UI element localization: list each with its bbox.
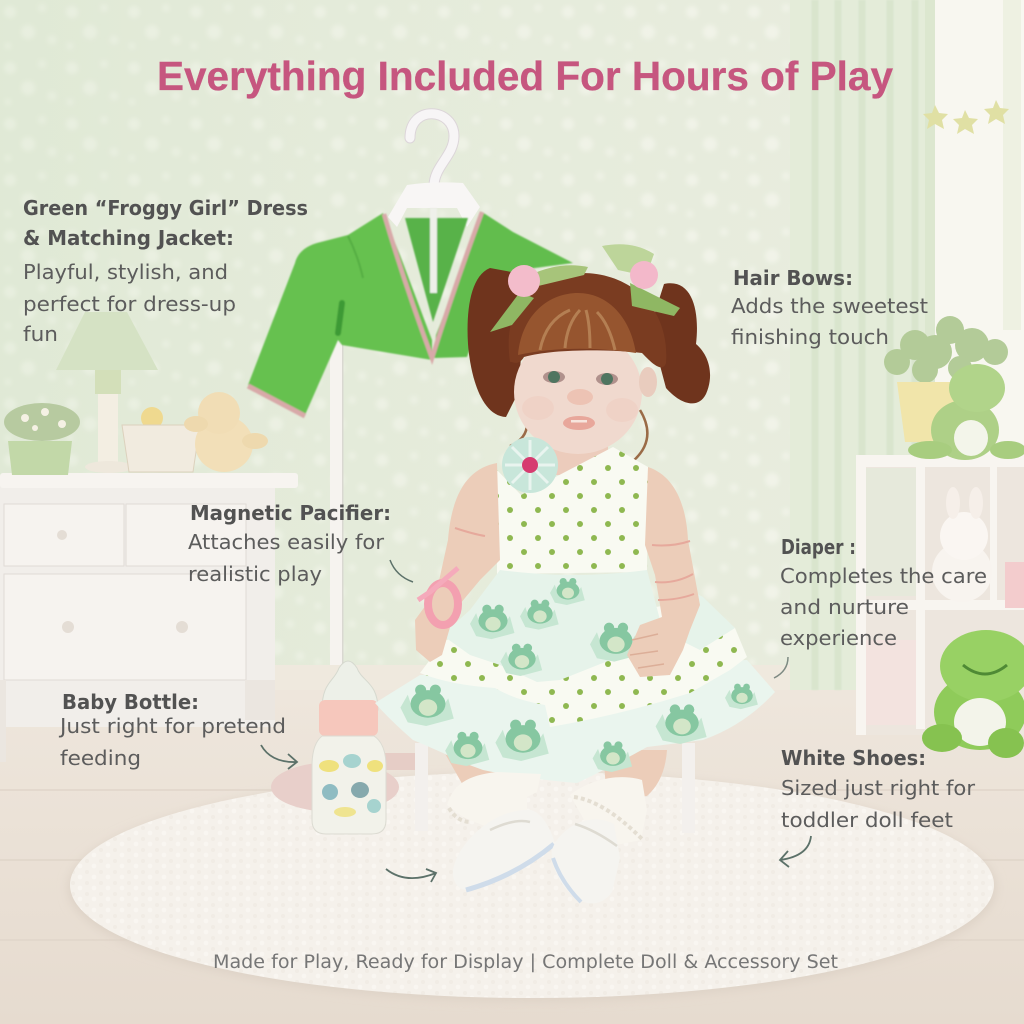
elbow joints	[455, 528, 694, 600]
window and curtains	[790, 0, 1024, 690]
arrow to diaper	[774, 657, 788, 678]
table lamp	[56, 312, 158, 473]
callout: white shoes: White Shoes:	[781, 746, 926, 770]
callout: magnetic pacifier: Magnetic Pacifier:	[190, 501, 391, 525]
callout: magnetic pacifier: Attaches easily for	[188, 530, 385, 554]
callout: hair bows: Hair Bows:	[733, 266, 853, 290]
arms	[415, 463, 700, 677]
dresser	[0, 473, 298, 762]
plush bunny	[932, 487, 992, 602]
callout: hair bows: finishing touch	[731, 325, 889, 349]
star bunting	[923, 100, 1009, 134]
potted plant	[4, 403, 80, 475]
callout: diaper: experience	[780, 626, 897, 650]
callout: baby bottle: Just right for pretend	[58, 714, 286, 738]
callout: magnetic pacifier	[188, 501, 391, 586]
collar rosette	[502, 437, 558, 493]
callout: diaper: and nurture	[780, 595, 909, 619]
hair bow right	[602, 244, 680, 316]
socks	[447, 772, 647, 848]
hair bow left	[490, 265, 588, 332]
cheeks	[522, 396, 638, 422]
nose and mouth	[563, 389, 595, 430]
pacifier	[418, 568, 458, 625]
callout: baby bottle	[58, 690, 286, 770]
callout: magnetic pacifier: realistic play	[188, 562, 322, 586]
baby bottle	[312, 661, 386, 834]
callout: white shoes	[781, 746, 976, 832]
skirt bottom tier	[375, 660, 775, 783]
arrow to shoes left	[386, 869, 436, 882]
green jacket	[248, 208, 573, 416]
plush frog upper	[908, 364, 1024, 460]
doll legs	[443, 750, 667, 810]
skirt top tier	[442, 570, 735, 682]
callout: dress and jacket: Green “Froggy Girl” Dress	[23, 196, 308, 220]
bodice polka dot	[497, 447, 648, 574]
ear	[639, 367, 657, 397]
plant in yellow pot	[884, 316, 1008, 442]
title: Everything Included For Hours of Play	[157, 53, 893, 99]
callout: diaper	[780, 535, 987, 650]
callout: dress and jacket: fun	[23, 322, 58, 346]
arrow to shoes right	[780, 836, 811, 867]
callout: dress and jacket: & Matching Jacket:	[23, 226, 234, 250]
arrow to bottle	[261, 745, 297, 769]
callout: baby bottle: feeding	[60, 746, 141, 770]
neck	[553, 440, 608, 475]
hair cap and bangs	[509, 273, 666, 367]
doll	[375, 244, 775, 903]
callout: white shoes: Sized just right for	[781, 776, 976, 800]
skirt dotted tier	[420, 600, 747, 727]
callout: diaper: Diaper :	[781, 535, 856, 559]
footer tagline: Made for Play, Ready for Display | Complete Doll & Accessory Set	[213, 952, 838, 973]
callout: dress and jacket: Playful, stylish, and	[23, 260, 228, 284]
callout: hair bows	[731, 266, 928, 349]
eyes	[543, 371, 618, 385]
callout: dress and jacket: perfect for dress-up	[23, 292, 236, 316]
callout: dress and jacket	[23, 196, 308, 346]
callout: baby bottle: Baby Bottle:	[62, 690, 199, 714]
plush frog lower	[922, 630, 1024, 758]
callout: white shoes: toddler doll feet	[781, 808, 953, 832]
chair legs	[415, 743, 695, 833]
back hair	[468, 268, 710, 417]
finger lines	[630, 634, 664, 668]
callout: diaper: Completes the care	[780, 564, 987, 588]
shoes	[453, 810, 620, 903]
basket and teddy bear	[122, 392, 268, 472]
round white rug	[68, 772, 996, 1001]
callout: hair bows: Adds the sweetest	[731, 294, 928, 318]
head	[514, 330, 642, 454]
arrow to pacifier	[390, 560, 413, 582]
hanger	[388, 114, 480, 227]
shelf unit	[856, 455, 1024, 735]
curls	[510, 410, 647, 462]
garment stand	[271, 340, 415, 812]
